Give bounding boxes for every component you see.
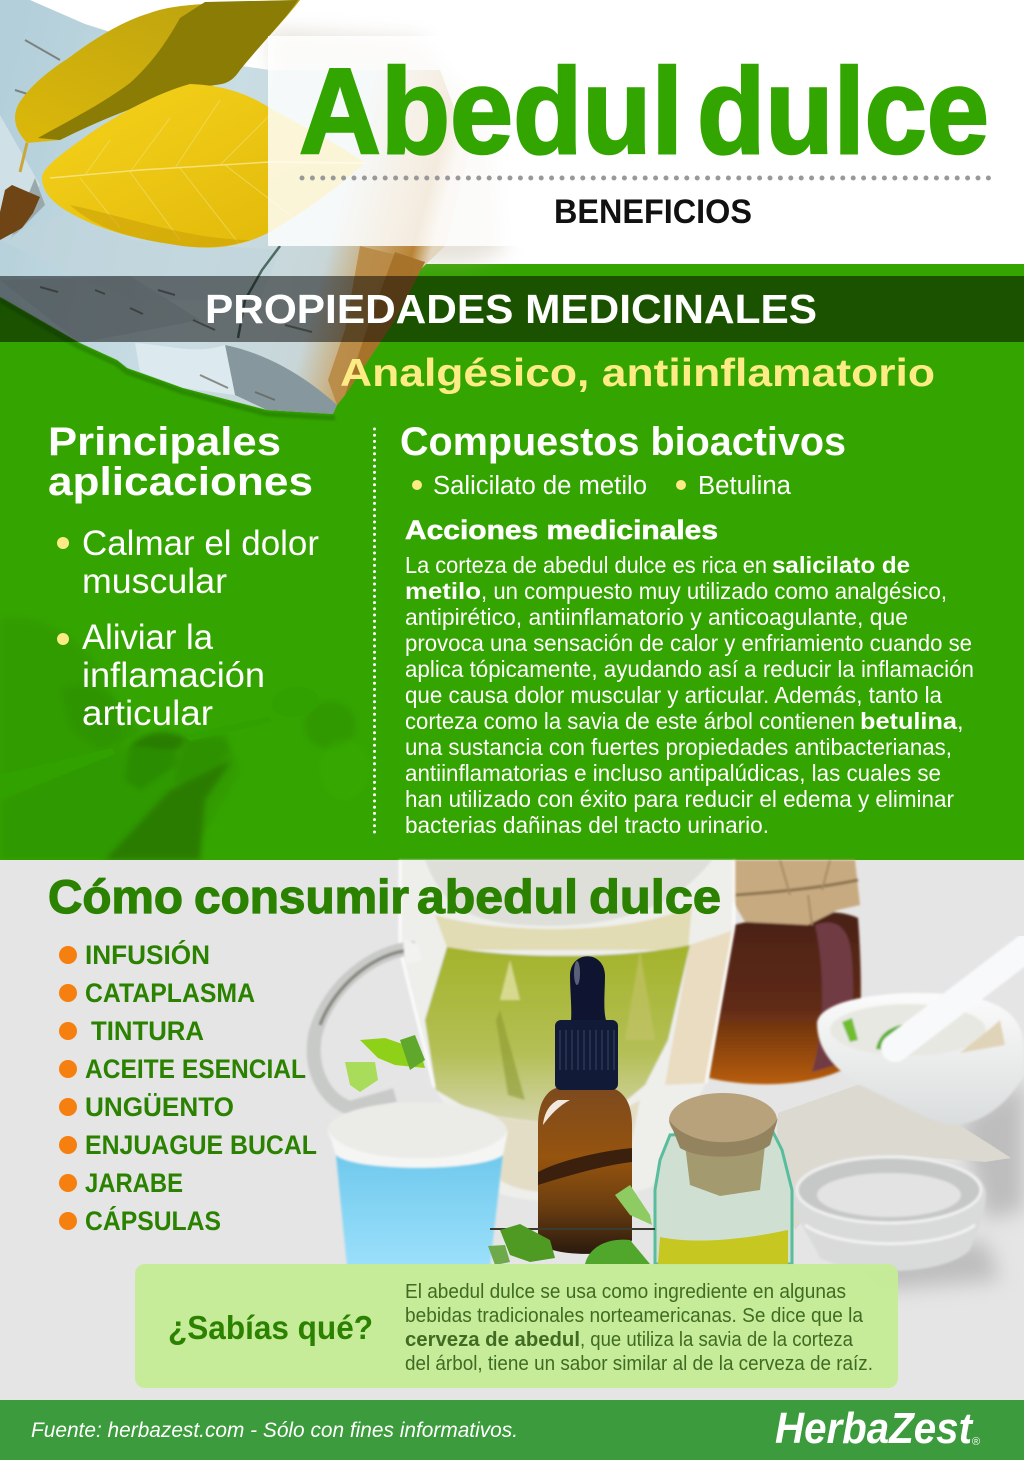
callout text: bebidas tradicionales norteamericanas. Se dice que la — [405, 1304, 864, 1327]
logo: HerbaZest: HerbaZest — [775, 1404, 974, 1453]
panel: medicinal properties green background — [0, 264, 1024, 860]
banner: medicinal properties — [0, 276, 1024, 342]
callout heading: ¿Sabías qué? — [168, 1309, 373, 1346]
text block: medicinal actions: que causa dolor muscular y articular. Además, tanto la — [405, 682, 943, 708]
image: green leaves behind mug — [345, 1035, 425, 1092]
image: soft shadow around bark — [268, 30, 505, 264]
text block: medicinal actions — [405, 552, 974, 838]
image: birch cone — [0, 185, 40, 240]
title: dulce — [697, 43, 989, 179]
list item: muscle pain: Calmar el dolor — [82, 524, 319, 563]
list item: joint inflammation: inflamación — [82, 656, 265, 695]
item: essential oil: ACEITE ESENCIAL — [85, 1054, 306, 1084]
image: honey jar with kraft paper lid — [709, 860, 861, 1084]
callout: did you know — [135, 1264, 898, 1388]
callout text — [405, 1280, 873, 1375]
item: syrup: JARABE — [85, 1168, 183, 1198]
heading: how to consume: consumir — [194, 870, 409, 923]
callout text: El abedul dulce se usa como ingrediente en algunas — [405, 1280, 846, 1303]
image: birch bark roll — [0, 0, 470, 418]
banner: medicinal properties: PROPIEDADES MEDICINALES — [205, 286, 817, 332]
image: white mortar and pestle — [817, 945, 1024, 1125]
heading: medicinal actions: Acciones medicinales — [405, 515, 718, 545]
footer bar — [0, 1400, 1024, 1460]
heading: how to consume: dulce — [589, 870, 721, 923]
logo: HerbaZest: ® — [972, 1436, 980, 1448]
image: cork jar with oil — [655, 1093, 792, 1264]
heading: main applications: Principales — [48, 420, 281, 464]
dotted divider — [302, 176, 992, 180]
heading: main applications: aplicaciones — [48, 460, 313, 504]
callout text: del árbol, tiene un sabor similar al de la cerveza de raíz. — [405, 1352, 873, 1375]
text block: medicinal actions: , un compuesto muy utilizado como analgésico, — [481, 578, 947, 604]
heading: how to consume: Cómo — [48, 870, 183, 923]
heading: how to consume: abedul — [417, 870, 578, 923]
list item: muscle pain — [57, 524, 319, 601]
image: glass tea mug — [314, 860, 734, 1201]
image: amber dropper bottle — [538, 956, 632, 1254]
text block: medicinal actions: aplica tópicamente, ayudando así a reducir la inflamación — [405, 656, 974, 682]
list item: joint inflammation: articular — [82, 694, 213, 733]
heading: bioactive compounds: Compuestos bioactivos — [400, 420, 846, 464]
item: tincture: TINTURA — [91, 1016, 204, 1046]
text block: medicinal actions: metilo — [405, 578, 481, 604]
image: birch twig and leaves — [488, 1185, 655, 1265]
image: hand applying ointment with swab — [0, 618, 370, 860]
text block: medicinal actions: provoca una sensación de calor y enfriamiento cuando se — [405, 630, 972, 656]
title — [299, 43, 989, 179]
panel: how to consume background — [0, 860, 1024, 1400]
text block: medicinal actions: antipirético, antiinflamatorio y anticoagulante, que — [405, 604, 908, 630]
image: upper yellow leaf — [15, 0, 300, 172]
text block: medicinal actions: corteza como la savia de este árbol contienen — [405, 708, 855, 734]
item: ointment: UNGÜENTO — [85, 1092, 234, 1122]
image: linen cloth — [775, 1083, 1011, 1230]
subheading: analgesic, anti-inflammatory: Analgésico, antiinflamatorio — [340, 352, 935, 395]
heading: main applications — [48, 420, 313, 504]
list item: muscle pain: muscular — [82, 562, 227, 601]
panel: bioactive compounds — [400, 420, 974, 838]
image: soft shadows under objects — [850, 1080, 1024, 1290]
item: capsules: CÁPSULAS — [85, 1205, 221, 1236]
text block: medicinal actions: han utilizado con éxito para reducir el edema y eliminar — [405, 786, 954, 812]
subtitle: BENEFICIOS — [554, 193, 752, 231]
text block: medicinal actions: antiinflamatorias e incluso antipalúdicas, las cuales se — [405, 760, 941, 786]
item: infusion: INFUSIÓN — [85, 939, 210, 970]
source note: Fuente: herbazest.com - Sólo con fines informativos. — [31, 1419, 518, 1442]
callout text: cerveza de abedul — [405, 1328, 580, 1351]
list item: joint inflammation — [57, 618, 265, 733]
image: blue paper cup — [327, 1102, 508, 1266]
text block: medicinal actions: bacterias dañinas del tracto urinario. — [405, 812, 769, 838]
item: poultice: CATAPLASMA — [85, 978, 255, 1008]
panel: main applications — [48, 420, 319, 733]
text block: medicinal actions: betulina — [860, 708, 958, 734]
heading: how to consume — [48, 870, 721, 923]
compound: methyl salicylate: Salicilato de metilo — [433, 472, 647, 500]
text block: medicinal actions: una sustancia con fuertes propiedades antibacterianas, — [405, 734, 952, 760]
list item: joint inflammation: Aliviar la — [82, 618, 214, 657]
image: lower yellow leaf — [42, 84, 365, 248]
callout text: , que utiliza la savia de la corteza — [580, 1328, 854, 1351]
title backdrop panel — [268, 36, 1024, 246]
text block: medicinal actions: salicilato de — [772, 552, 910, 578]
list: forms of consumption — [59, 939, 317, 1236]
item: mouthwash: ENJUAGUE BUCAL — [85, 1130, 317, 1160]
compound: betulin: Betulina — [698, 472, 792, 500]
image: cotton swab — [0, 684, 321, 800]
title: Abedul — [299, 43, 683, 179]
text block: medicinal actions: La corteza de abedul dulce es rica en — [405, 552, 767, 578]
text block: medicinal actions: , — [957, 708, 964, 734]
image: glass bowl — [792, 1155, 986, 1271]
